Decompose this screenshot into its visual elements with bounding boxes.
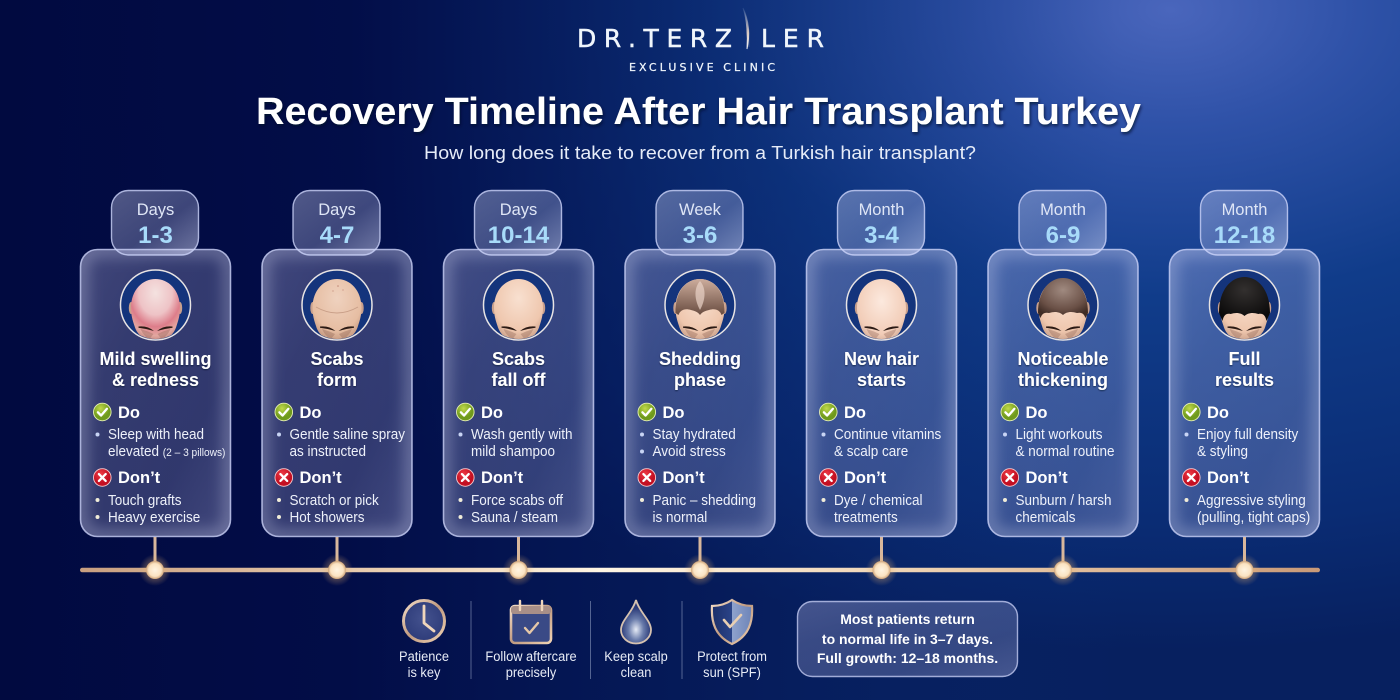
time badge: week 3-6: Week xyxy=(679,201,722,219)
time badge: days 10-14: Days xyxy=(500,201,537,219)
tip: keep scalp clean: Keep scalp xyxy=(604,649,668,664)
don't list: Don’t xyxy=(1207,469,1250,487)
tip: follow aftercare precisely: precisely xyxy=(506,665,557,680)
logo: Dr. Terziler Exclusive Clinic: DR.TERZ xyxy=(577,24,732,53)
do list: as instructed xyxy=(290,443,366,459)
time badge: month 6-9: Month xyxy=(1040,201,1086,219)
panel: month 6-9 xyxy=(988,190,1138,537)
do list: Do xyxy=(1026,404,1048,422)
head: thickening hair xyxy=(1028,270,1098,343)
heading: Shedding xyxy=(659,349,741,369)
heading: results xyxy=(1215,370,1274,390)
time badge: days 10-14 xyxy=(474,190,562,255)
do list: Do xyxy=(300,404,322,422)
tip: protect from sun: Protect from xyxy=(697,649,767,664)
heading: starts xyxy=(857,370,906,390)
time badge: month 6-9: 6-9 xyxy=(1046,222,1080,249)
icon: water drop xyxy=(621,600,651,644)
don't list: Force scabs off xyxy=(471,492,563,508)
callout: return to normal life: Full growth: 12–18 months. xyxy=(817,650,998,666)
do list: Enjoy full density xyxy=(1197,426,1298,442)
do list: & scalp care xyxy=(834,443,908,459)
panel: month 12-18 xyxy=(1169,190,1320,537)
head: clear scalp xyxy=(484,270,554,343)
heading xyxy=(99,349,212,390)
don't list: Aggressive styling xyxy=(1197,492,1306,508)
do list: & normal routine xyxy=(1016,443,1115,459)
don't list xyxy=(275,469,380,525)
don't list xyxy=(1001,469,1112,525)
head: full dark hair xyxy=(1210,270,1280,343)
don't list: Don’t xyxy=(1026,469,1068,487)
don't list: Panic – shedding xyxy=(652,492,756,508)
heading xyxy=(1017,349,1109,390)
do list xyxy=(820,403,941,459)
tip: patience is key xyxy=(399,600,449,680)
panel: days 1-3 xyxy=(80,190,231,537)
heading: phase xyxy=(674,370,726,390)
heading xyxy=(1215,349,1274,390)
tip: patience is key: is key xyxy=(408,665,441,680)
don't list: Dye / chemical xyxy=(834,492,922,508)
do list: Do xyxy=(662,404,684,422)
time badge: week 3-6 xyxy=(656,190,743,255)
heading: Noticeable xyxy=(1017,349,1109,369)
tip: follow aftercare precisely xyxy=(485,601,577,680)
do list xyxy=(638,403,736,459)
don't list: Sauna / steam xyxy=(471,509,558,525)
time badge: month 3-4: 3-4 xyxy=(864,222,899,249)
don't list: Don’t xyxy=(118,469,161,487)
tip: protect from sun xyxy=(697,600,767,680)
time badge: days 4-7: 4-7 xyxy=(320,222,354,249)
don't list: Touch grafts xyxy=(108,492,181,508)
callout: return to normal life: Most patients return xyxy=(840,611,975,627)
tip: protect from sun: sun (SPF) xyxy=(703,665,761,680)
timeline with connectors and nodes xyxy=(80,537,1320,586)
don't list: Hot showers xyxy=(290,509,364,525)
panel: month 3-4 xyxy=(806,190,957,537)
don't list: (pulling, tight caps) xyxy=(1197,509,1310,525)
dividers xyxy=(471,601,682,679)
time badge: week 3-6: 3-6 xyxy=(683,222,717,249)
logo: Dr. Terziler Exclusive Clinic xyxy=(577,8,824,74)
don't list: chemicals xyxy=(1016,509,1075,525)
don't list: Sunburn / harsh xyxy=(1016,492,1112,508)
logo: Dr. Terziler Exclusive Clinic: I xyxy=(745,25,752,53)
heading: Scabs xyxy=(492,349,545,369)
heading: form xyxy=(317,370,357,390)
head: scalp with scabs xyxy=(302,270,372,343)
do list xyxy=(94,403,225,459)
do list xyxy=(275,403,405,459)
heading: fall off xyxy=(492,370,546,390)
icon: clock xyxy=(404,600,444,642)
heading xyxy=(844,349,919,390)
heading xyxy=(310,349,364,390)
logo: Dr. Terziler Exclusive Clinic: LER xyxy=(761,24,824,53)
logo: Dr. Terziler Exclusive Clinic: EXCLUSIVE CLINIC xyxy=(629,61,775,74)
don't list: Don’t xyxy=(481,469,524,487)
do list: Sleep with head xyxy=(108,426,204,442)
time badge: month 6-9 xyxy=(1019,190,1106,255)
tip: keep scalp clean: clean xyxy=(621,665,651,680)
time badge: days 4-7: Days xyxy=(318,201,356,219)
don't list xyxy=(820,469,922,525)
time badge: days 1-3: 1-3 xyxy=(138,222,173,249)
heading: Mild swelling xyxy=(99,349,212,369)
icon: calendar with check xyxy=(511,601,551,643)
do list: Wash gently with xyxy=(471,426,572,442)
subtitle: How long does it take to recover from a Turkish hair transplant? xyxy=(424,143,976,163)
panel: days 10-14 xyxy=(443,190,594,537)
do list xyxy=(1182,403,1298,459)
do list xyxy=(456,403,572,459)
do list: Do xyxy=(481,404,503,422)
head: swollen and red scalp xyxy=(120,270,190,343)
do list: Do xyxy=(1207,404,1229,422)
do list: Continue vitamins xyxy=(834,426,941,442)
do list: Light workouts xyxy=(1016,426,1102,442)
tip: keep scalp clean xyxy=(604,600,668,680)
time badge: month 12-18 xyxy=(1200,190,1288,255)
panel: week 3-6 xyxy=(624,190,776,537)
time badge: days 4-7 xyxy=(293,190,380,255)
do list: mild shampoo xyxy=(471,443,555,459)
don't list: Don’t xyxy=(300,469,342,487)
callout: return to normal life: to normal life in 3–7 days. xyxy=(822,631,993,647)
heading xyxy=(659,349,741,390)
do list: Do xyxy=(118,404,140,422)
do list: Avoid stress xyxy=(652,443,726,459)
don't list: Scratch or pick xyxy=(290,492,380,508)
don't list: Don’t xyxy=(844,469,887,487)
heading: New hair xyxy=(844,349,919,369)
tip: follow aftercare precisely: Follow aftercare xyxy=(485,649,577,664)
don't list xyxy=(1182,469,1310,525)
do list xyxy=(1001,403,1115,459)
time badge: month 3-4: Month xyxy=(859,201,904,219)
don't list: treatments xyxy=(834,509,898,525)
panel: days 4-7 xyxy=(262,190,412,537)
don't list: is normal xyxy=(652,509,707,525)
time badge: month 12-18: Month xyxy=(1222,201,1267,219)
do list: Do xyxy=(844,404,866,422)
heading: Full xyxy=(1228,349,1260,369)
time badge: days 1-3: Days xyxy=(137,201,174,219)
heading: thickening xyxy=(1018,370,1108,390)
don't list: Don’t xyxy=(662,469,705,487)
don't list xyxy=(456,469,563,525)
heading: & redness xyxy=(112,370,199,390)
head: thinning shedding hair xyxy=(665,270,735,343)
do list: Gentle saline spray xyxy=(290,426,405,442)
tip: patience is key: Patience xyxy=(399,649,449,664)
heading xyxy=(492,349,546,390)
callout: return to normal life xyxy=(798,602,1018,676)
don't list xyxy=(94,469,200,525)
do list: Stay hydrated xyxy=(652,426,736,442)
do list: & styling xyxy=(1197,443,1248,459)
don't list: Heavy exercise xyxy=(108,509,200,525)
do list: elevated (2 – 3 pillows) xyxy=(108,443,225,459)
title: Recovery Timeline After Hair Transplant Turkey xyxy=(256,91,1141,133)
time badge: month 3-4 xyxy=(838,190,924,255)
time badge: month 12-18: 12-18 xyxy=(1214,222,1275,249)
time badge: days 1-3 xyxy=(112,190,198,255)
time badge: days 10-14: 10-14 xyxy=(488,222,550,249)
head: new hair starting xyxy=(846,270,916,343)
icon: shield with check xyxy=(712,600,752,644)
don't list xyxy=(638,469,756,525)
heading: Scabs xyxy=(310,349,364,369)
